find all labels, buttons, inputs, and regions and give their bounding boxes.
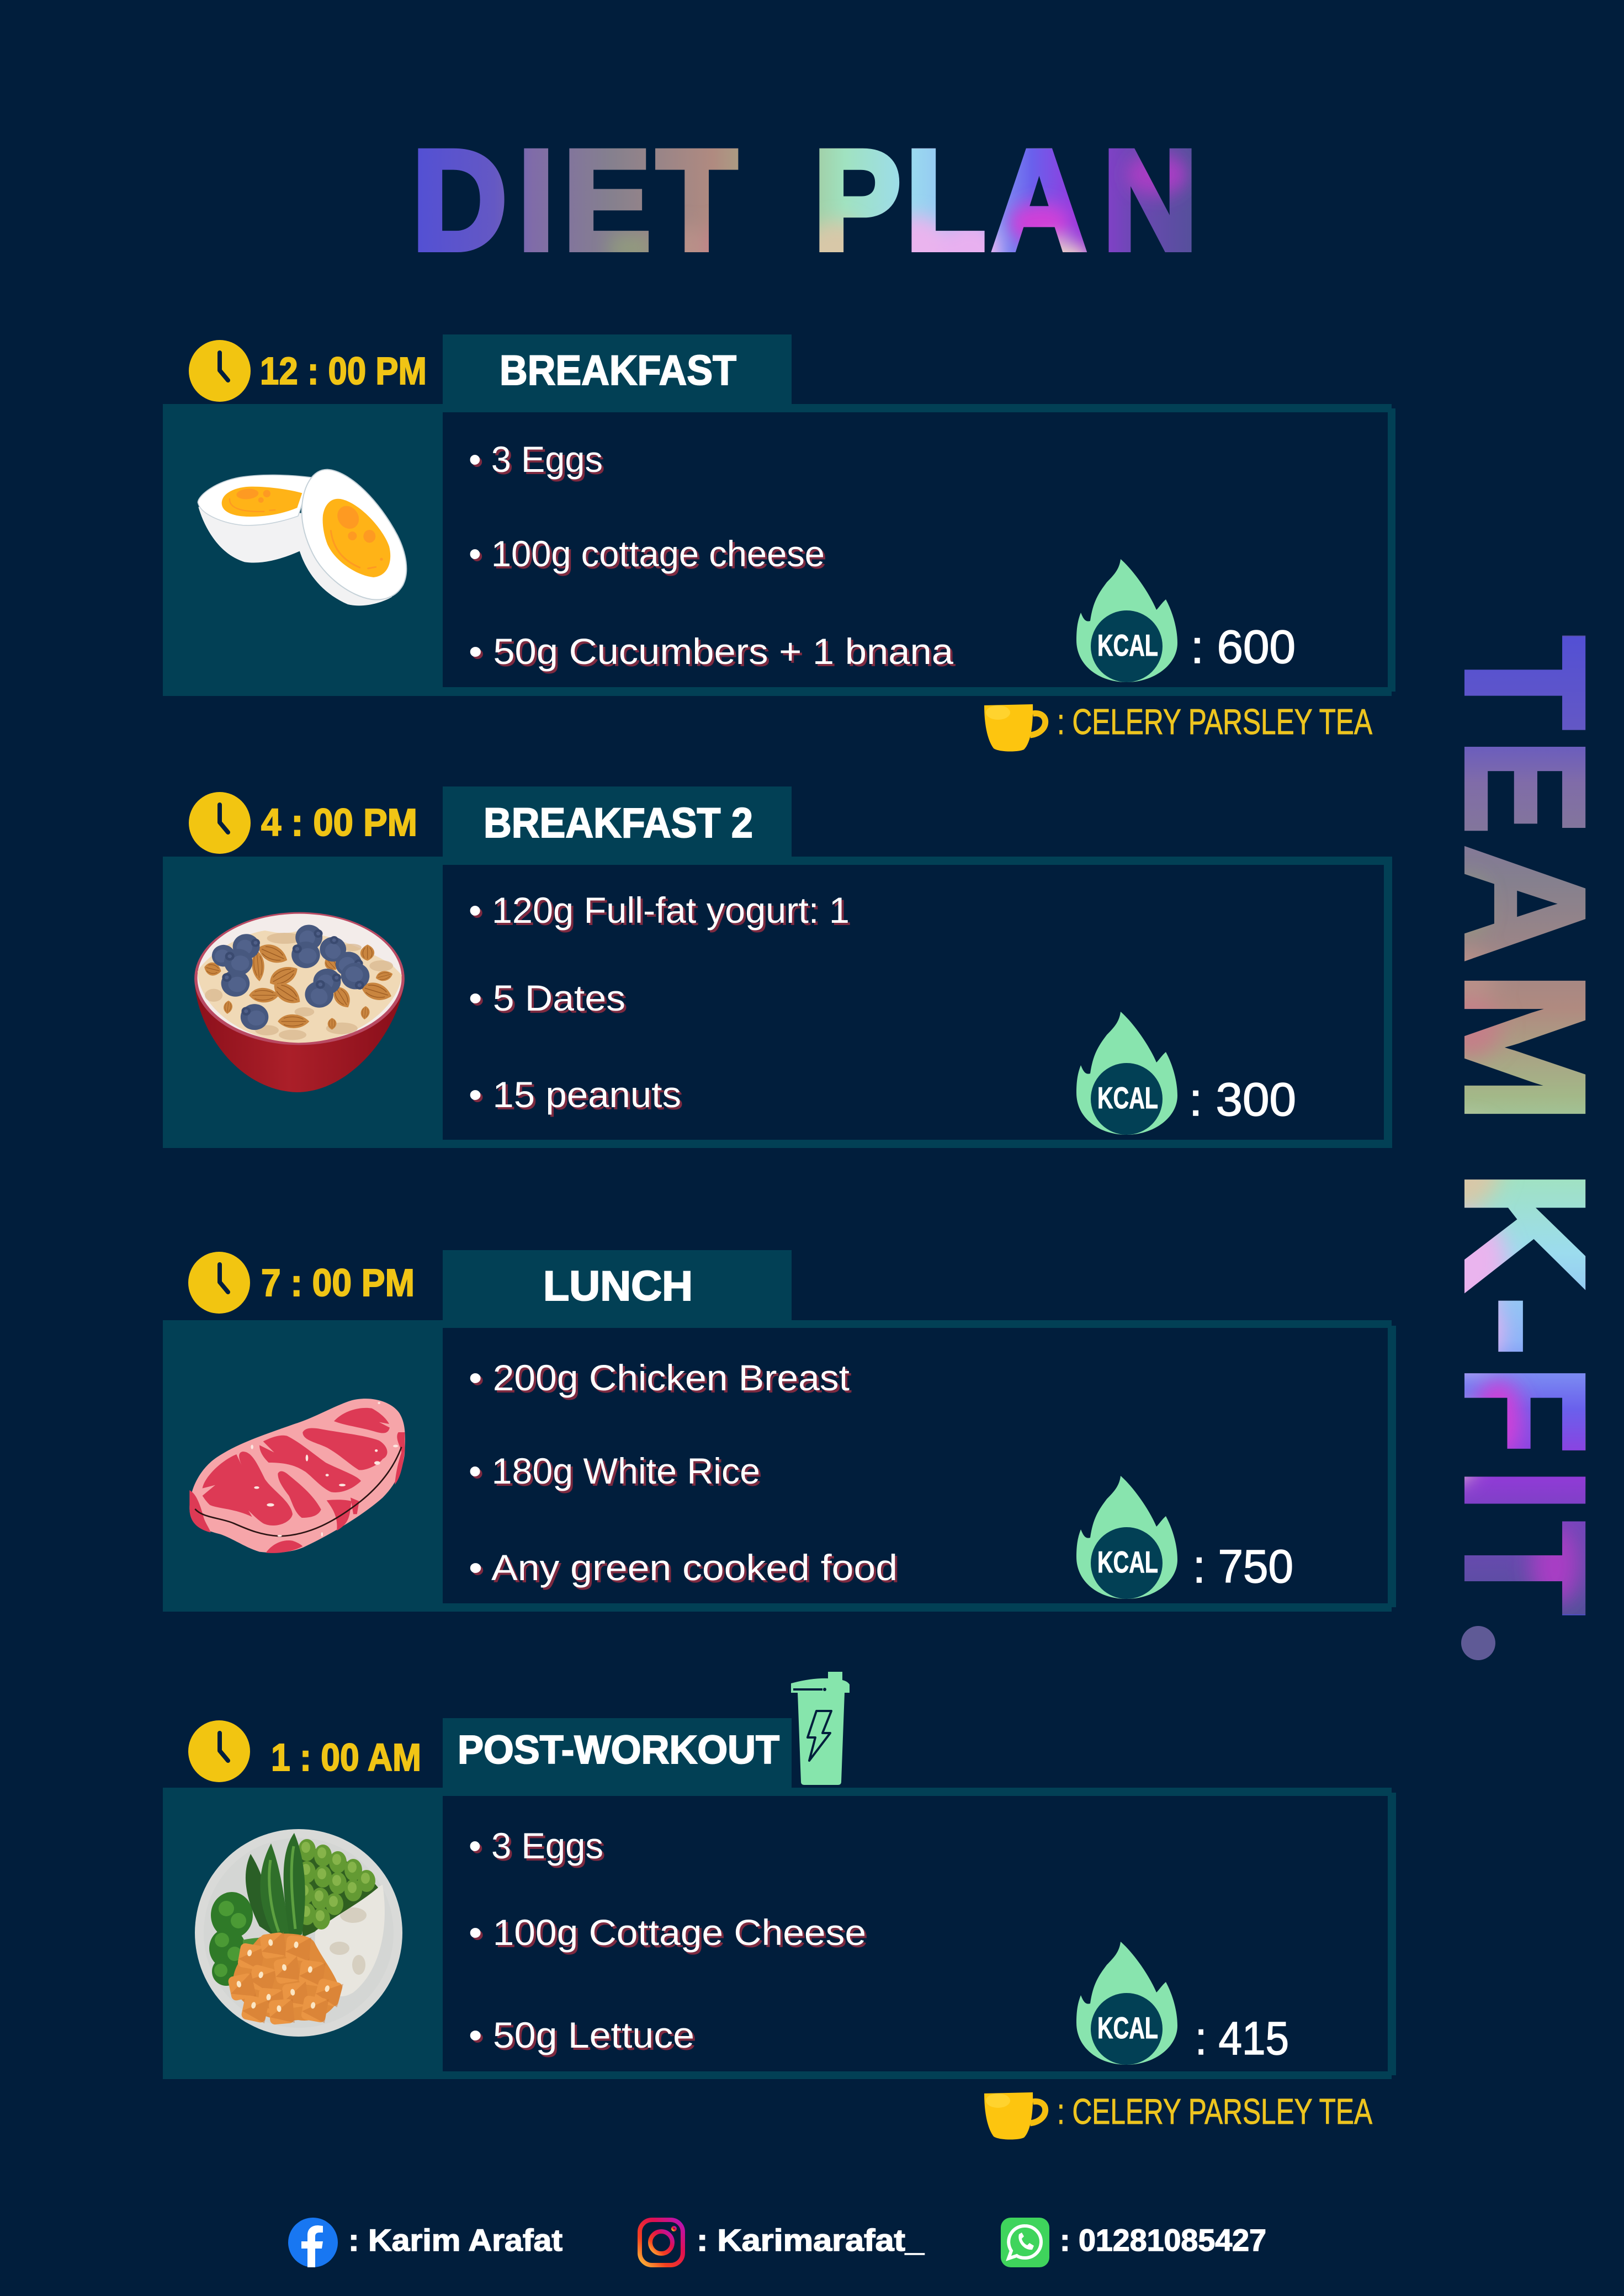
footer: social contacts xyxy=(288,2218,1266,2267)
side title: TEAM K-FIT.: I xyxy=(1430,1468,1620,1512)
icon: whatsapp xyxy=(1001,2218,1049,2267)
icon: mug xyxy=(984,2092,1045,2140)
side title: TEAM K-FIT.: - xyxy=(1430,1296,1620,1357)
icon: steak xyxy=(189,1399,405,1553)
food list: • 15 peanuts xyxy=(469,1074,681,1115)
panel: post-workout xyxy=(163,1672,1396,2140)
panel content area xyxy=(443,1328,1388,1603)
icon: shaker bottle xyxy=(791,1672,850,1785)
icon: instagram xyxy=(640,2220,683,2265)
panel frame xyxy=(163,1718,1396,2079)
clock icon xyxy=(188,1252,250,1314)
heading: BREAKFAST 2 xyxy=(484,800,753,847)
icon: oatmeal bowl xyxy=(194,912,405,1092)
food list xyxy=(469,1357,898,1588)
facebook name: : Karim Arafat xyxy=(348,2223,562,2257)
icon: kcal flame: KCAL xyxy=(1097,1545,1158,1579)
icon: plate of food xyxy=(195,1829,402,2037)
clock icon xyxy=(188,1720,250,1782)
drink: : CELERY PARSLEY TEA xyxy=(1057,701,1372,742)
title: DIET PLAN xyxy=(412,120,1198,280)
instagram name: : Karimarafat_ xyxy=(697,2223,925,2257)
calories: : 600 xyxy=(1191,621,1296,673)
panel: breakfast xyxy=(163,334,1395,752)
time: 4 : 00 PM xyxy=(261,801,417,844)
food list: • 100g Cottage Cheese xyxy=(469,1912,866,1953)
clock icon xyxy=(189,340,251,402)
heading: LUNCH xyxy=(543,1263,693,1310)
food list: • 50g Lettuce xyxy=(469,2015,694,2055)
food list: • Any green cooked food xyxy=(469,1547,898,1588)
food list: • 200g Chicken Breast xyxy=(469,1357,850,1398)
panel frame xyxy=(163,334,1395,696)
icon: facebook xyxy=(288,2218,338,2267)
clock icon xyxy=(189,792,251,854)
food list: • 5 Dates xyxy=(469,977,625,1018)
calories: : 750 xyxy=(1193,1540,1293,1592)
food list: • 3 Eggs xyxy=(469,439,603,480)
title: DIET PLAN: DIET xyxy=(412,120,737,280)
icon: kcal flame xyxy=(1076,1476,1177,1599)
side title: TEAM K-FIT.: M xyxy=(1430,971,1620,1124)
panel: breakfast 2 xyxy=(163,786,1392,1148)
panel content area xyxy=(443,865,1384,1140)
icon: mug xyxy=(984,704,1045,752)
icon: kcal flame: KCAL xyxy=(1097,628,1158,662)
icon: kcal flame xyxy=(1076,559,1177,682)
panel frame xyxy=(163,786,1392,1148)
icon: kcal flame xyxy=(1076,1942,1177,2065)
time: 12 : 00 PM xyxy=(260,349,427,392)
phone number: : 01281085427 xyxy=(1060,2223,1266,2257)
side title: TEAM K-FIT.: F xyxy=(1430,1365,1620,1454)
side title: TEAM K-FIT.: E xyxy=(1430,739,1620,835)
side title: TEAM K-FIT.: T xyxy=(1430,636,1620,730)
side title: TEAM K-FIT.: A xyxy=(1430,845,1620,963)
food list xyxy=(469,439,953,672)
heading: BREAKFAST xyxy=(500,347,736,394)
food list: • 180g White Rice xyxy=(469,1450,760,1491)
side title: TEAM K-FIT.: K xyxy=(1430,1171,1620,1290)
calories: : 415 xyxy=(1195,2012,1289,2064)
side title: TEAM K-FIT.: T xyxy=(1430,1522,1620,1615)
time: 7 : 00 PM xyxy=(261,1261,415,1304)
time: 1 : 00 AM xyxy=(271,1736,421,1779)
heading: POST-WORKOUT xyxy=(458,1728,779,1772)
food list xyxy=(469,890,850,1115)
panel content area xyxy=(443,1796,1388,2071)
drink: : CELERY PARSLEY TEA xyxy=(1057,2091,1372,2132)
icon: boiled eggs xyxy=(198,470,406,605)
panel content area xyxy=(443,412,1388,687)
food list: • 100g cottage cheese xyxy=(469,533,825,574)
panel: lunch xyxy=(163,1250,1396,1612)
food list xyxy=(469,1825,866,2055)
calories: : 300 xyxy=(1189,1073,1296,1125)
side title: TEAM K-FIT. xyxy=(1430,636,1620,1660)
icon: kcal flame: KCAL xyxy=(1097,1081,1158,1115)
title: DIET PLAN: PLAN xyxy=(813,120,1198,280)
icon: kcal flame xyxy=(1076,1012,1177,1135)
food list: • 3 Eggs xyxy=(469,1825,603,1866)
food list: • 120g Full-fat yogurt: 1 xyxy=(469,890,850,931)
food list: • 50g Cucumbers + 1 bnana xyxy=(469,631,953,672)
icon: kcal flame: KCAL xyxy=(1097,2011,1158,2045)
panel frame xyxy=(163,1250,1396,1612)
